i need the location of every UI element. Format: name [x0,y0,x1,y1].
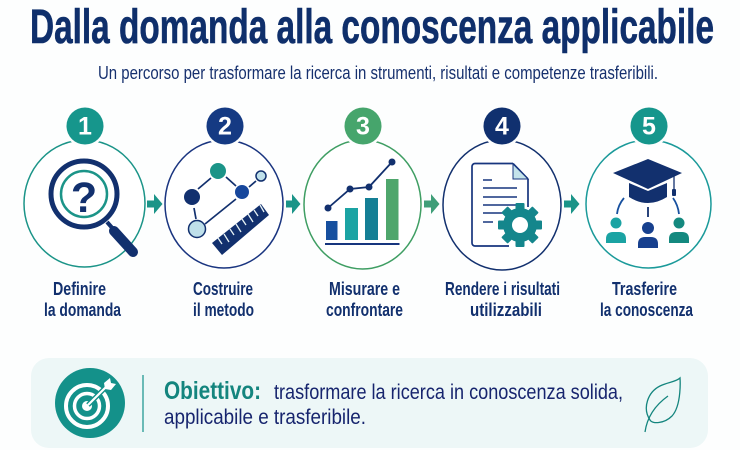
icon: network of nodes [184,163,266,238]
step 2: costruire il metodo [165,105,283,320]
step 3 label: confrontare [326,300,403,320]
arrow 4 [564,194,580,214]
icon: ruler [212,204,269,255]
step 3 number badge [342,105,384,147]
connectors from cap to people [617,198,679,217]
objective heading: Obiettivo: [164,377,261,405]
icon: target with arrow [55,368,125,438]
step 3 circle [304,140,421,269]
step 4 label [445,279,560,320]
step 1 number badge: 1 [78,112,92,140]
divider [142,375,144,432]
step 2 number badge: 2 [218,112,232,140]
step 5 label [600,279,694,320]
step 5 label: Trasferire [612,279,677,299]
step 3 label: Misurare e [329,279,400,299]
step 1 number badge [64,105,106,147]
step 2 label [193,279,254,320]
icon: magnifying glass with question mark [51,161,133,252]
step 2 number badge [204,105,246,147]
panel: objective [31,358,708,448]
objective text: trasformare la ricerca in conoscenza solida, [274,381,623,404]
step 5: trasferire la conoscenza [586,105,711,320]
step 5 circle [586,140,711,268]
step 3 label [326,279,403,320]
step 2 circle [165,140,283,268]
icon: magnifying glass with question mark: ? [71,174,97,222]
step 4 circle [443,140,561,270]
step 5 number badge: 5 [642,112,656,140]
step 3: misurare e confrontare [304,105,421,320]
icon: people [606,218,689,248]
step 4: rendere i risultati utilizzabili [443,105,561,320]
arrow 3 [424,194,440,214]
step 5 number badge [628,105,670,147]
step 4 number badge: 4 [495,112,509,140]
icon: gear [498,203,542,247]
icon: leaf [645,378,680,432]
step 3 number badge: 3 [356,112,370,140]
panel background [31,358,708,448]
icon: document [472,164,528,246]
step 4 label: Rendere i risultati [445,279,560,299]
arrow 2 [286,194,300,214]
step 4 number badge [481,105,523,147]
step 1 label [44,279,122,320]
step 1 circle [24,140,145,267]
bar chart with trend line [324,158,400,244]
step 4 label: utilizzabili [470,300,542,320]
step 1 label: la domanda [44,300,122,320]
step 2 label: il metodo [193,300,254,320]
arrow 1 [147,194,162,214]
step 5 label: la conoscenza [600,300,694,320]
step 1 label: Definire [53,279,106,299]
objective text: applicabile e trasferibile. [164,406,366,429]
icon: graduation cap [613,159,682,203]
step 1: definire la domanda [24,105,145,320]
step 2 label: Costruire [193,279,253,299]
objective text [164,381,623,429]
